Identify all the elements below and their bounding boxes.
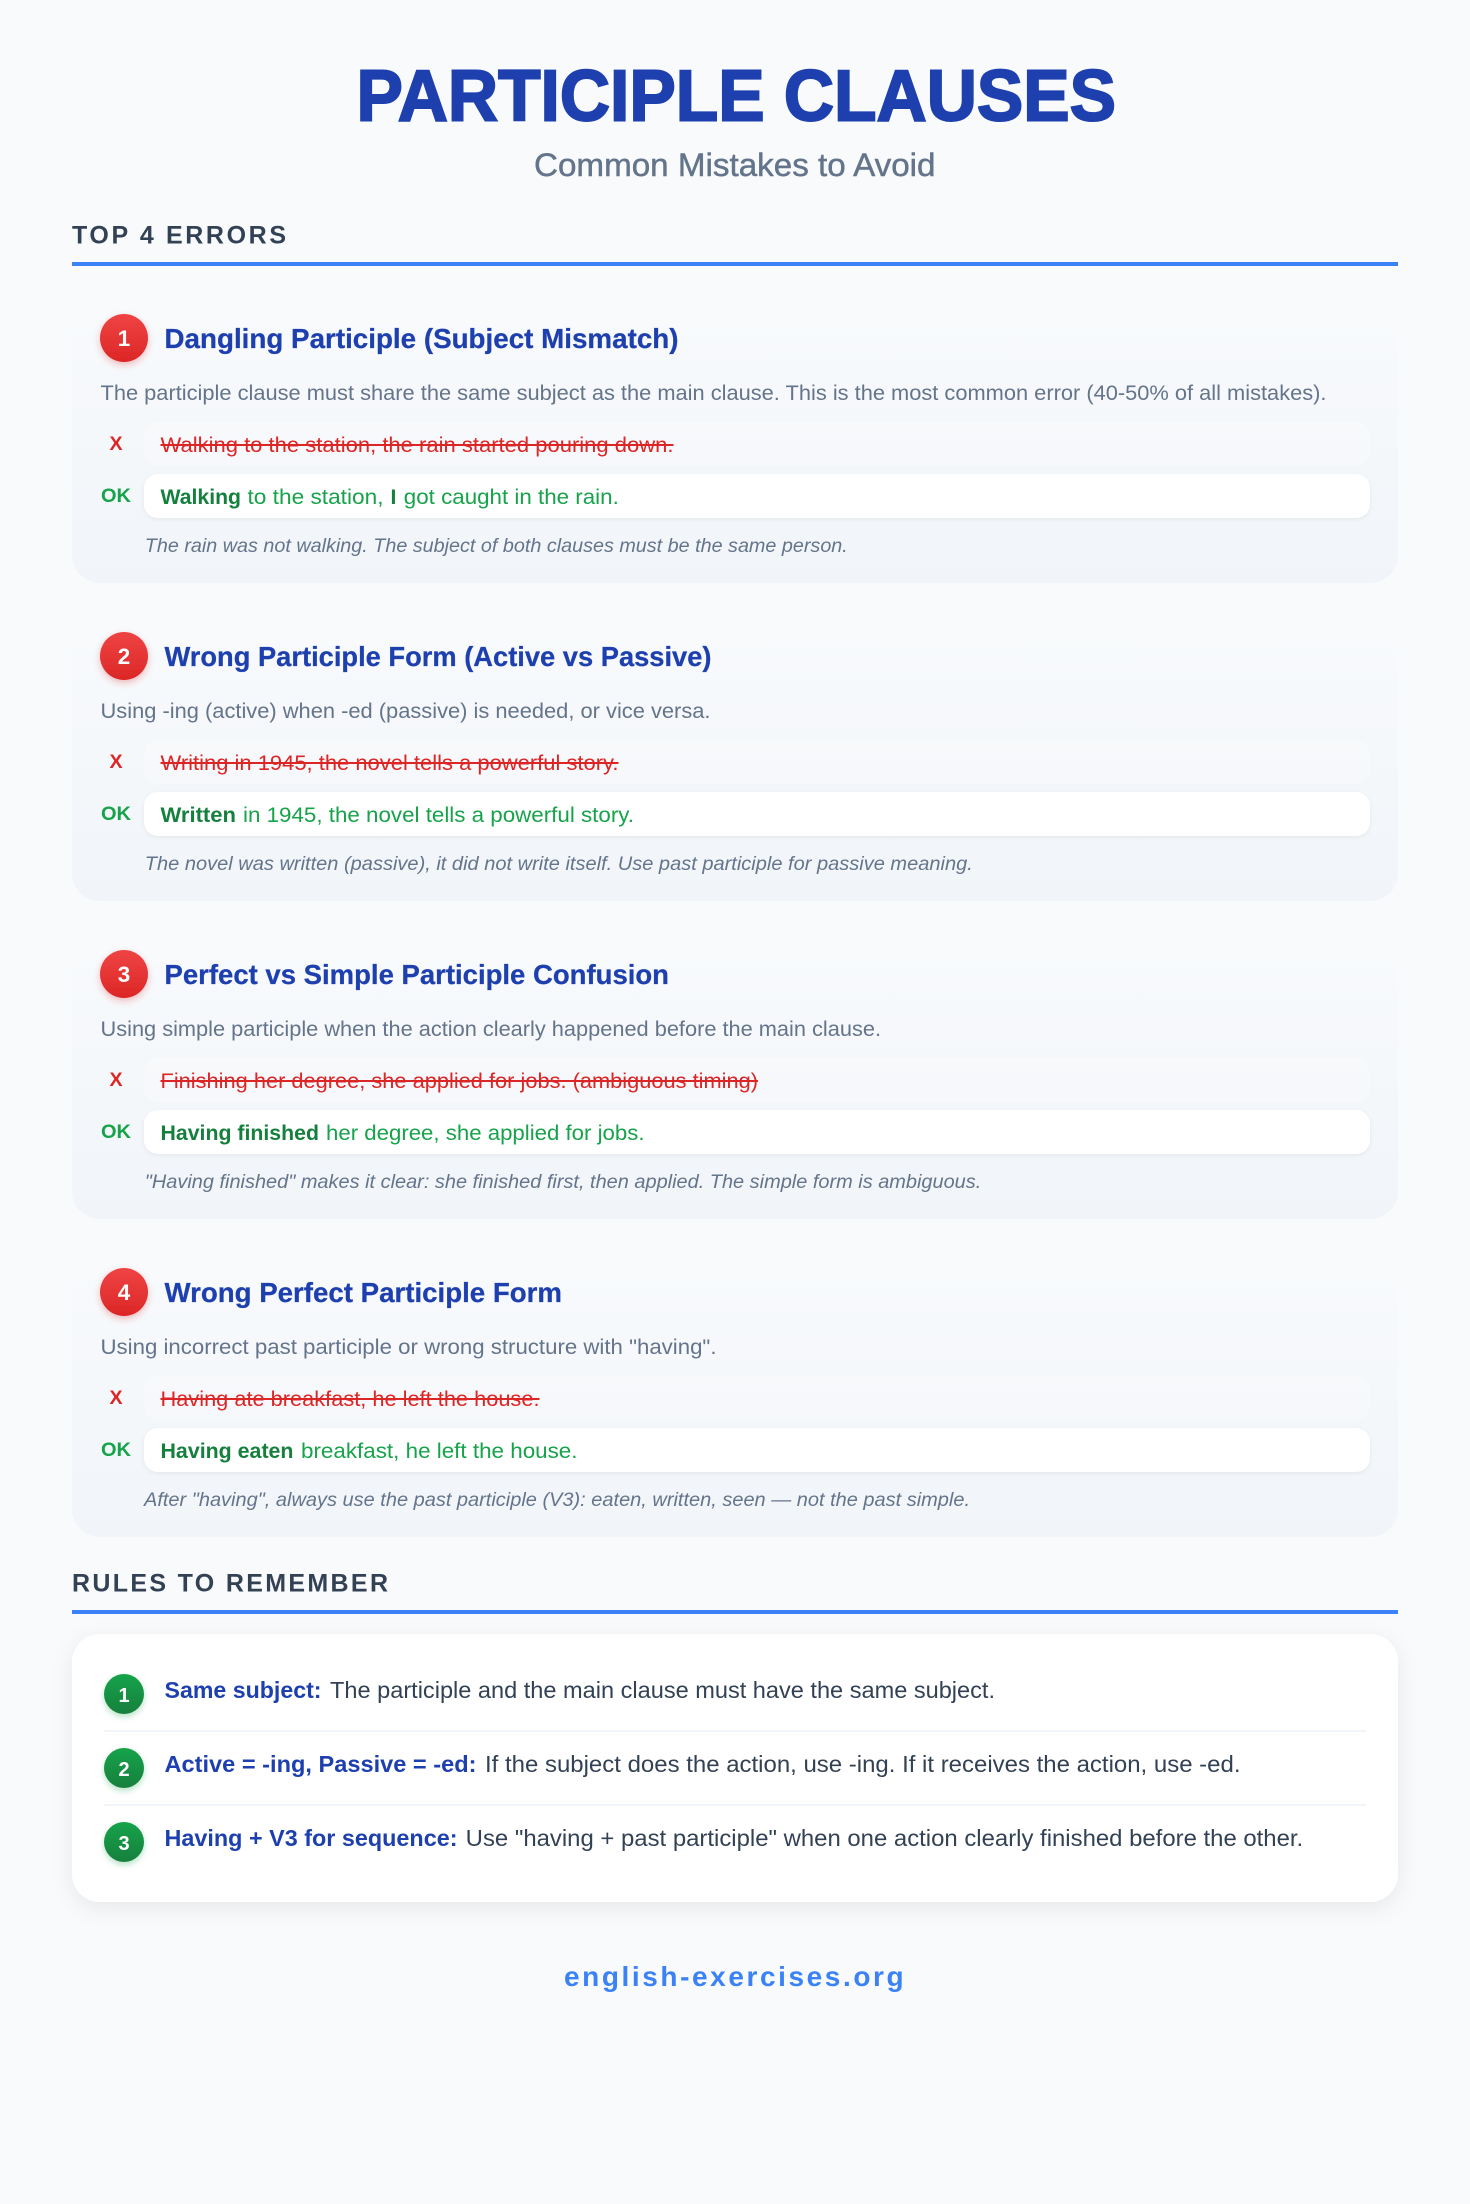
section heading: top 4 errors <box>72 221 1398 266</box>
correct example 3: her degree, she applied for jobs. <box>326 1122 644 1145</box>
description 1: The participle clause must share the same subject as the main clause. This is the most common error (40-50% of all mistakes). <box>100 382 1326 405</box>
heading 1: Dangling Participle (Subject Mismatch) <box>164 323 678 354</box>
incorrect example 1 <box>109 422 1370 466</box>
rule 2: Active = -ing, Passive = -ed: <box>164 1751 476 1777</box>
panel: error 2 wrong participle form <box>72 622 1398 901</box>
section heading: rules to remember <box>72 1569 1398 1614</box>
heading 3: Perfect vs Simple Participle Confusion <box>164 959 669 990</box>
note 3: "Having finished" makes it clear: she finished first, then applied. The simple form is ambiguous. <box>145 1172 981 1193</box>
section heading: top 4 errors: TOP 4 ERRORS <box>72 221 286 249</box>
correct example 3: Having finished <box>160 1122 319 1145</box>
badge 1: 1 <box>118 326 130 351</box>
rule 3: Use "having + past participle" when one action clearly finished before the other. <box>466 1825 1303 1851</box>
description 2: Using -ing (active) when -ed (passive) is needed, or vice versa. <box>100 700 710 723</box>
rule 3: 3 <box>118 1833 130 1855</box>
rule 3 <box>104 1822 1303 1862</box>
rule 2 <box>104 1748 1240 1788</box>
correct example 4: breakfast, he left the house. <box>301 1440 578 1463</box>
heading 2: Wrong Participle Form (Active vs Passive) <box>164 641 712 672</box>
correct example 2: in 1945, the novel tells a powerful story. <box>243 804 634 827</box>
correct example 2: Written <box>160 804 236 827</box>
correct example 1: OK <box>101 485 131 507</box>
incorrect example 1: Walking to the station, the rain started pouring down. <box>160 434 674 457</box>
correct example 3 <box>101 1110 1370 1154</box>
badge 3 <box>100 950 148 998</box>
badge 4 <box>100 1268 148 1316</box>
panel: error 4 wrong perfect participle form <box>72 1258 1398 1537</box>
note 1: The rain was not walking. The subject of both clauses must be the same person. <box>145 536 848 557</box>
panel: error 1 dangling participle <box>72 304 1398 583</box>
correct example 1: got caught in the rain. <box>404 486 619 509</box>
incorrect example 2: Writing in 1945, the novel tells a powerful story. <box>160 752 618 775</box>
correct example 3: OK <box>101 1121 131 1143</box>
footer: website: english-exercises.org <box>564 1961 905 1992</box>
title: PARTICIPLE CLAUSES <box>356 56 1116 137</box>
subtitle: Common Mistakes to Avoid <box>534 147 936 183</box>
incorrect example 3: X <box>109 1069 123 1091</box>
incorrect example 2: X <box>109 751 123 773</box>
badge 1 <box>100 314 148 362</box>
badge 2: 2 <box>118 644 130 669</box>
rule 1: The participle and the main clause must have the same subject. <box>330 1677 995 1703</box>
correct example 4 <box>101 1428 1370 1472</box>
note 2: The novel was written (passive), it did not write itself. Use past participle for passive meaning. <box>145 854 973 875</box>
correct example 4: Having eaten <box>160 1440 294 1463</box>
description 4: Using incorrect past participle or wrong structure with "having". <box>100 1336 716 1359</box>
rule 2: 2 <box>118 1759 130 1781</box>
incorrect example 2 <box>109 740 1370 784</box>
incorrect example 3: Finishing her degree, she applied for jobs. (ambiguous timing) <box>160 1070 758 1093</box>
correct example 1: I <box>390 486 396 509</box>
badge 2 <box>100 632 148 680</box>
correct example 2: OK <box>101 803 131 825</box>
rule 1: Same subject: <box>164 1677 322 1703</box>
description 3: Using simple participle when the action clearly happened before the main clause. <box>100 1018 881 1041</box>
rule 3: Having + V3 for sequence: <box>164 1825 458 1851</box>
correct example 2 <box>101 792 1370 836</box>
correct example 1: Walking <box>160 486 241 509</box>
incorrect example 4: Having ate breakfast, he left the house. <box>160 1388 540 1411</box>
correct example 1 <box>101 474 1370 518</box>
correct example 1: to the station, <box>248 486 384 509</box>
panel: rules <box>72 1634 1398 1902</box>
rule 1: 1 <box>118 1685 130 1707</box>
incorrect example 3 <box>109 1058 1370 1102</box>
panel: error 3 perfect vs simple <box>72 940 1398 1219</box>
note 4: After "having", always use the past participle (V3): eaten, written, seen — not the past simple. <box>143 1490 970 1511</box>
badge 4: 4 <box>118 1280 131 1305</box>
incorrect example 4 <box>109 1376 1370 1420</box>
incorrect example 1: X <box>109 433 123 455</box>
rule 1 <box>104 1674 995 1714</box>
rule 2: If the subject does the action, use -ing. If it receives the action, use -ed. <box>485 1751 1240 1777</box>
correct example 4: OK <box>101 1439 131 1461</box>
badge 3: 3 <box>118 962 130 987</box>
incorrect example 4: X <box>109 1387 123 1409</box>
heading 4: Wrong Perfect Participle Form <box>164 1277 562 1308</box>
section heading: rules to remember: RULES TO REMEMBER <box>72 1569 388 1597</box>
